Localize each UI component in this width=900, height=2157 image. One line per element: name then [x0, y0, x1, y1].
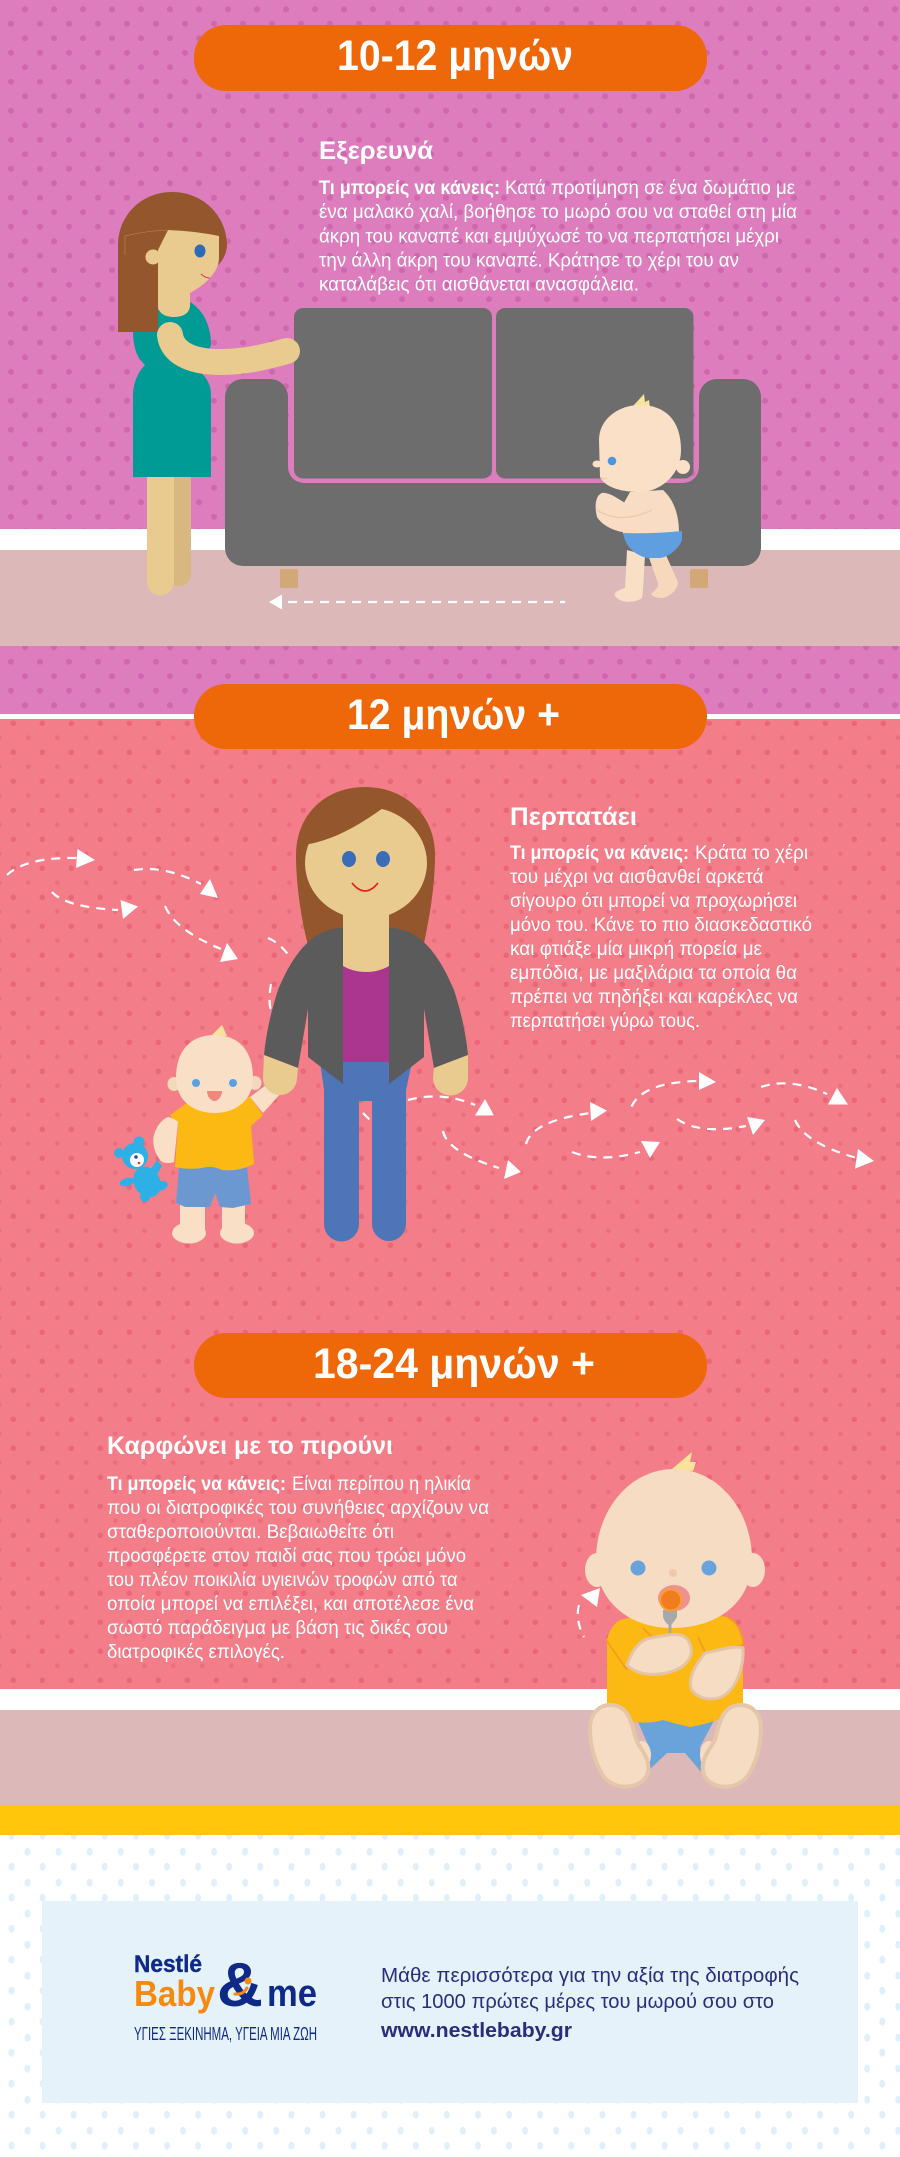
text block: explores: Κατά προτίμηση σε ένα δωμάτιο με [505, 178, 796, 199]
text block: fork: διατροφικές επιλογές. [107, 1642, 285, 1663]
text block: fork: Είναι περίπου η ηλικία [292, 1474, 471, 1495]
text block: walks [510, 843, 812, 1032]
heading: fork: Καρφώνει με το πιρούνι [107, 1432, 393, 1460]
text block: fork: σταθεροποιούνται. Βεβαιωθείτε ότι [107, 1522, 394, 1543]
panel: 10-12 months [0, 0, 900, 715]
mother [118, 192, 287, 596]
text block: fork: οποία μπορεί να επιλέξει, και αποτέλεσε ένα [107, 1594, 474, 1615]
pill: 12 months plus: 12 μηνών + [347, 691, 560, 739]
text block: learn more: στις 1000 πρώτες μέρες του μωρού σου στο [381, 1991, 774, 2013]
baby by the sofa [592, 394, 690, 602]
text block: walks: περπατήσει γύρω τους. [510, 1011, 700, 1032]
text block: fork: σωστό παράδειγμα με βάση τις δικές σου [107, 1618, 448, 1639]
text block: explores: ένα μαλακό χαλί, βοήθησε το μωρό σου να σταθεί στη μία [319, 202, 797, 223]
text block: learn more: www.nestlebaby.gr [380, 2020, 572, 2042]
text block: fork [107, 1474, 489, 1663]
heading: walks: Περπατάει [510, 803, 637, 831]
text block: fork: που οι διατροφικές του συνήθειες αρχίζουν να [107, 1498, 489, 1519]
text block: walks: μόνο του. Κάνε το πιο διασκεδαστικό [510, 915, 812, 936]
pill: 10-12 months [194, 25, 707, 91]
dashed arrow left [269, 594, 565, 610]
panel: footer [0, 1835, 900, 2157]
text block: learn more: Μάθε περισσότερα για την αξία της διατροφής [381, 1965, 799, 1987]
sofa [225, 308, 761, 588]
toddler with teddy [114, 1025, 282, 1244]
pill: 12 months plus [194, 684, 707, 749]
seated baby with fork [585, 1452, 765, 1787]
text block: walks: σίγουρο ότι μπορεί να προχωρήσει [510, 891, 797, 912]
logo: Nestlé [134, 1951, 202, 1978]
text block: fork: του πλέον ποικιλία υγιεινών τροφών από τα [107, 1570, 458, 1591]
logo: ΥΓΙΕΣ ΞΕΚΙΝΗΜΑ, ΥΓΕΙΑ ΜΙΑ ΖΩΗ [134, 2024, 317, 2044]
text block: walks: του μέχρι να αισθανθεί αρκετά [510, 867, 764, 888]
text block: walks: πρέπει να πηδήξει και καρέκλες να [510, 987, 798, 1008]
text block: explores: άκρη του καναπέ και εμψύχωσέ το να περπατήσει μέχρι [319, 226, 779, 248]
text block: explores: καταλάβεις ότι αισθάνεται ανασφάλεια. [319, 274, 639, 296]
logo: & [217, 1951, 263, 2020]
text block: explores [319, 178, 797, 296]
logo [134, 1951, 317, 2044]
text block: explores: την άλλη άκρη του καναπέ. Κράτησε το χέρι του αν [319, 250, 739, 272]
text block: explores: Τι μπορείς να κάνεις: [319, 178, 500, 199]
pill: 18-24 months: 18-24 μηνών + [313, 1340, 595, 1388]
text block: learn more [380, 1965, 799, 2042]
logo: Baby [134, 1973, 215, 2014]
mother with jacket [263, 787, 468, 1242]
dashed arrows left [7, 849, 290, 1011]
text block: fork: προσφέρετε στον παιδί σας που τρώει μόνο [107, 1546, 466, 1567]
dashed arrows right [363, 1072, 874, 1179]
pill: 18-24 months [194, 1333, 707, 1398]
pill: 10-12 months: 10-12 μηνών [337, 32, 573, 80]
text block: walks: Τι μπορείς να κάνεις: [510, 843, 689, 864]
logo: me [267, 1973, 317, 2015]
heading: explores: Εξερευνά [319, 137, 434, 165]
yellow band [0, 1805, 900, 1835]
panel: 12 months plus [0, 684, 900, 1689]
panel: 18-24 months [0, 1333, 900, 1805]
text block: walks: και φτιάξε μία μικρή πορεία με [510, 939, 763, 960]
text block: walks: εμπόδια, με μαξιλάρια τα οποία θα [510, 963, 797, 984]
text block: walks: Κράτα το χέρι [695, 843, 808, 864]
teddy bear [114, 1136, 169, 1202]
dashed arrow to mouth [578, 1588, 600, 1637]
text block: fork: Τι μπορείς να κάνεις: [107, 1474, 286, 1495]
